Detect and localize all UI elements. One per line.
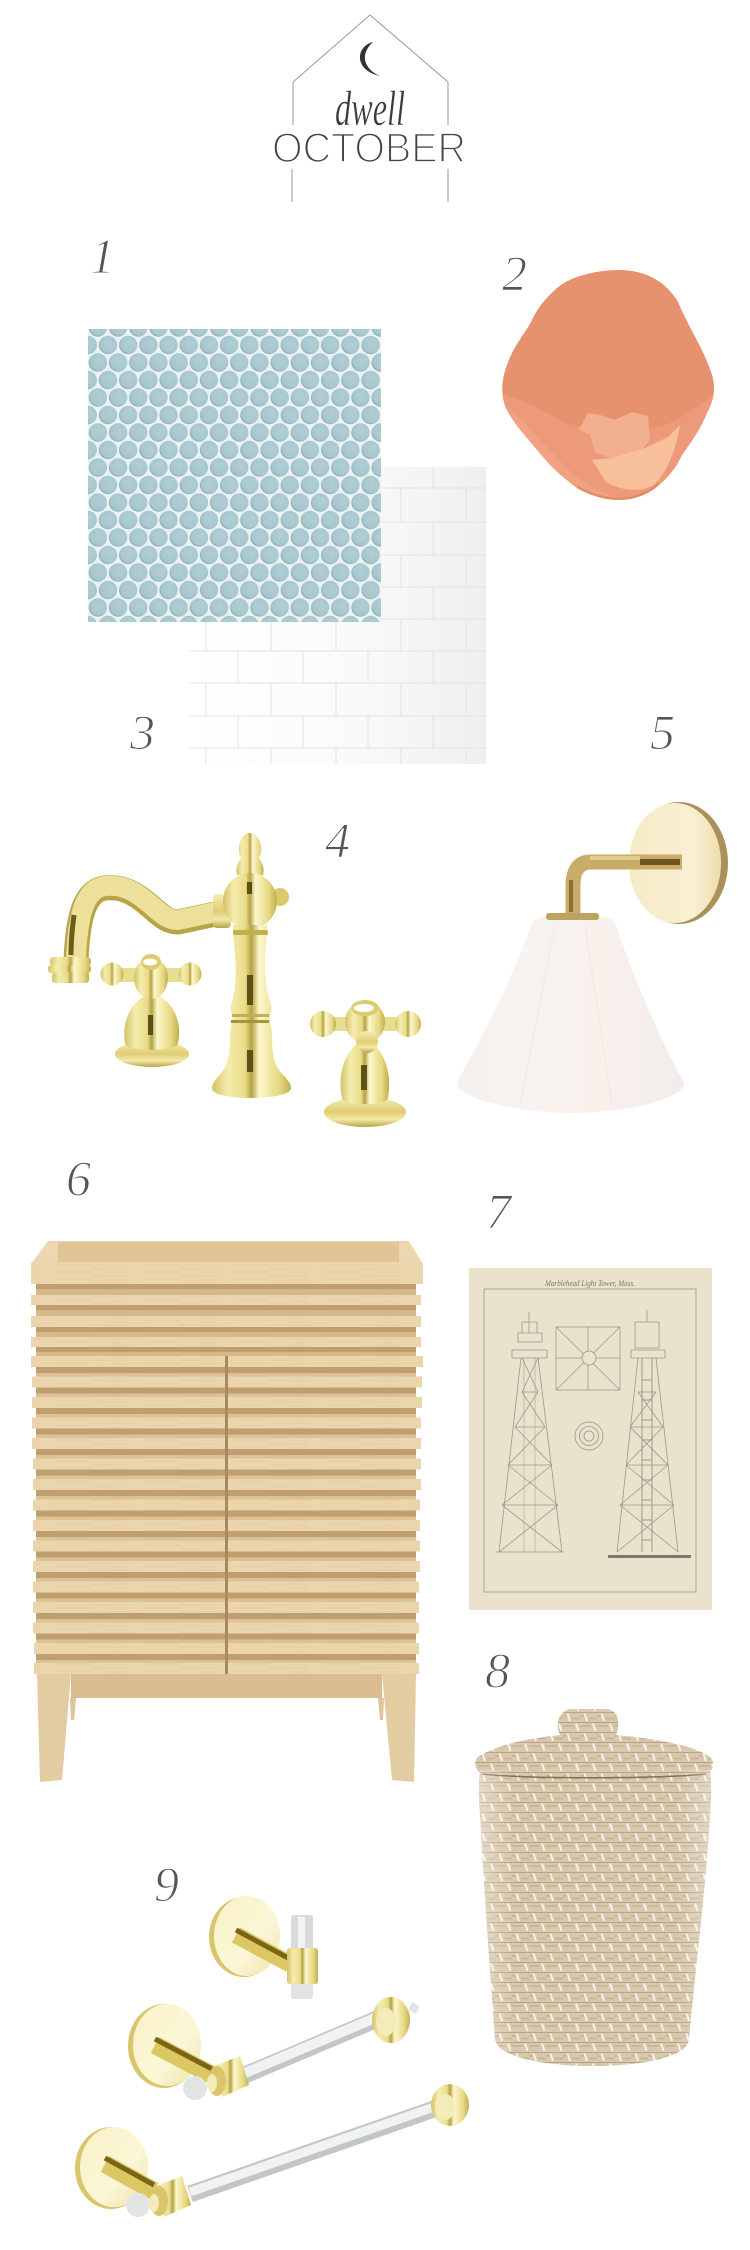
icon: crescent moon: [360, 42, 380, 76]
shade: [457, 916, 684, 1113]
art print: lighthouse blueprint: [469, 1268, 712, 1610]
paint swatch blob: [502, 270, 714, 500]
lid: [475, 1709, 713, 1777]
toilet paper holder: [128, 1997, 418, 2100]
left handle: [100, 954, 202, 1067]
number 5: 5: [650, 704, 675, 760]
body: [479, 1770, 711, 2066]
number 1: 1: [90, 228, 115, 284]
seagrass basket: [475, 1709, 713, 2066]
tray top: [31, 1241, 423, 1264]
door seam: [225, 1356, 228, 1674]
number 6: 6: [66, 1150, 91, 1206]
wall sconce: [457, 802, 728, 1113]
slats: [31, 1263, 423, 1674]
vanity cabinet: [31, 1241, 423, 1782]
swatch: white subway tile: [190, 467, 486, 764]
logo: house outline with title: [272, 15, 466, 202]
basket shading: [479, 1770, 711, 2066]
collar: [546, 913, 599, 920]
wood grain overlay: [36, 1263, 416, 1674]
number 2: 2: [502, 245, 527, 301]
right handle: [310, 1000, 421, 1127]
spout: [76, 888, 225, 960]
spout tip: [48, 957, 91, 983]
number 3: 3: [129, 704, 155, 760]
number 4: 4: [325, 812, 350, 868]
groove background: [36, 1273, 416, 1674]
towel hook: [209, 1896, 318, 1999]
towel bar: [75, 2084, 469, 2217]
faucet: [48, 833, 421, 1127]
wall plate: [630, 802, 728, 924]
number 7: 7: [486, 1183, 513, 1239]
back legs: [70, 1698, 384, 1720]
number 9: 9: [154, 1856, 179, 1912]
number 8: 8: [485, 1642, 510, 1698]
right tower drawing: [608, 1310, 691, 1558]
print title: Marblehead Light Tower, Mass.: [544, 1279, 635, 1288]
arm: [573, 862, 682, 915]
swatch: blue penny tile: [88, 329, 381, 622]
plan drawing: [556, 1327, 620, 1450]
faucet body: [212, 833, 291, 1098]
script word: dwell: dwell: [335, 80, 405, 136]
front legs and apron: [71, 1674, 382, 1698]
left tower drawing: [496, 1312, 564, 1552]
heading: OCTOBER: OCTOBER: [272, 124, 466, 171]
